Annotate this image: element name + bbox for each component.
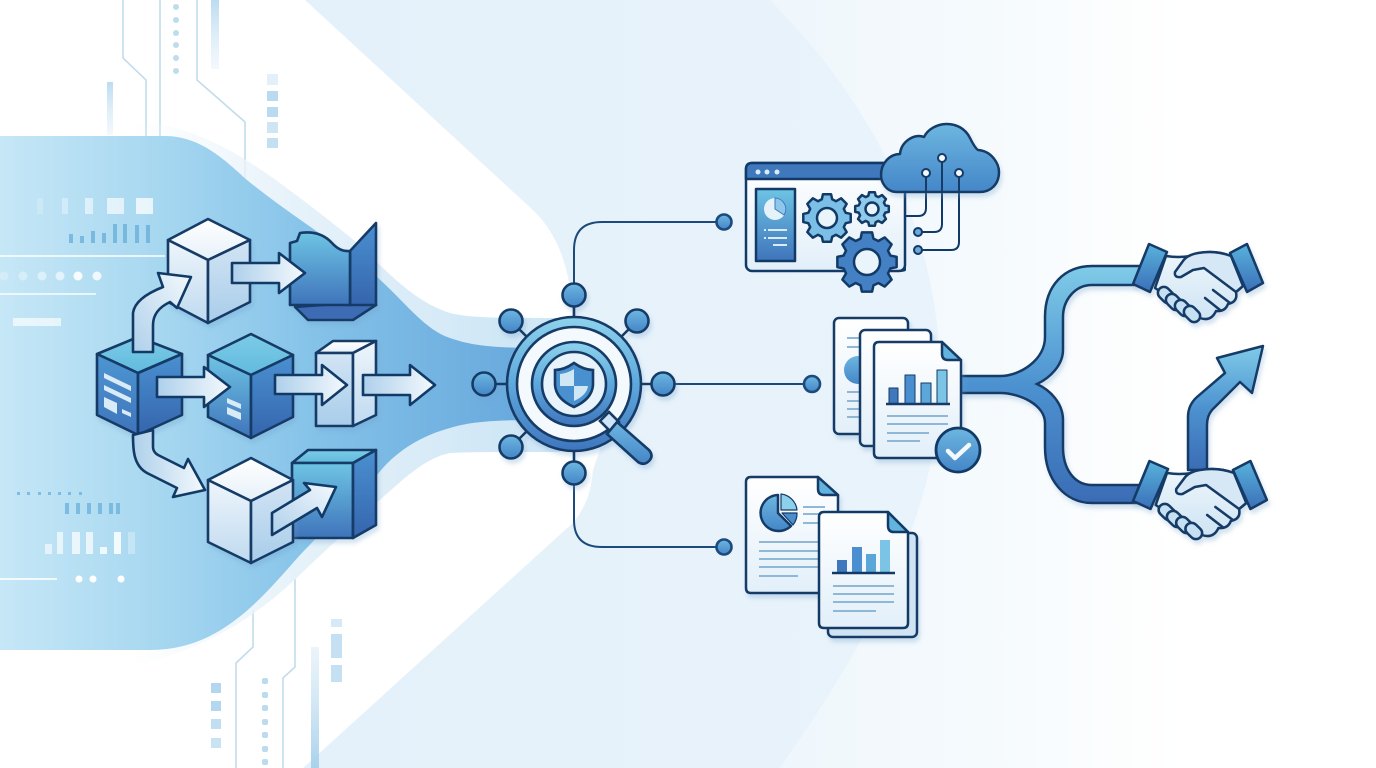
document stack with check (834, 318, 980, 472)
circuit lines from cloud (897, 158, 959, 271)
handshake bottom (1133, 461, 1267, 542)
funnel main blue flow (0, 136, 540, 650)
report documents bottom (746, 477, 917, 637)
cloud icon (881, 124, 999, 192)
document front with bar chart (874, 342, 961, 458)
dashboard side panel with pie (756, 189, 795, 261)
left circuit decoration: bottom (211, 530, 342, 768)
document back sheet (828, 533, 917, 637)
document back (834, 318, 908, 434)
shield icon (555, 363, 593, 407)
connector lines from hub (574, 222, 806, 547)
cube: top white (168, 219, 250, 323)
process cubes and arrows (97, 219, 435, 563)
box: lower right dark (292, 450, 376, 538)
cube: lower white (208, 458, 293, 563)
slim box middle right (316, 341, 376, 426)
hub nodes (472, 284, 674, 484)
funnel outer band (130, 122, 560, 665)
forked pipe to partners (961, 266, 1142, 503)
left circuit decoration: top (107, 0, 278, 205)
cube label marks (104, 373, 131, 417)
cube label marks (227, 398, 241, 420)
magnifier inner ring (532, 342, 616, 426)
arrow: lower cube to box (272, 483, 336, 535)
document with pie chart (746, 477, 838, 593)
arrow: top cube to folder (232, 253, 305, 293)
cube: source dark (97, 337, 182, 435)
gear large dark (837, 232, 897, 292)
right background fade (740, 0, 1180, 768)
growth arrow (1188, 346, 1263, 470)
handshake top (1133, 244, 1263, 325)
cube: middle dark (208, 334, 293, 438)
arrow: source to top cube (133, 273, 191, 352)
hub: magnifier with shield (472, 284, 674, 484)
check badge (936, 428, 980, 472)
arrow: slim box outward (363, 365, 435, 405)
box: folder shape upper right (290, 223, 376, 320)
arrow: source to middle cube (157, 367, 230, 407)
hub spokes (484, 295, 663, 473)
magnifier outer ring (507, 317, 641, 451)
document middle (860, 330, 931, 446)
gear small (855, 192, 889, 226)
document with bar chart (819, 512, 908, 628)
arrow: middle cube to slim box (275, 365, 347, 405)
central pale blue shape (303, 0, 940, 768)
gear large light (803, 194, 851, 242)
circuit end dots (914, 228, 922, 254)
connector end dots (716, 214, 820, 554)
cloud application group (746, 124, 999, 292)
arrow: source to lower cube (133, 430, 205, 497)
magnifier handle (600, 412, 652, 464)
funnel left data decoration (0, 198, 165, 582)
browser window (746, 163, 905, 271)
